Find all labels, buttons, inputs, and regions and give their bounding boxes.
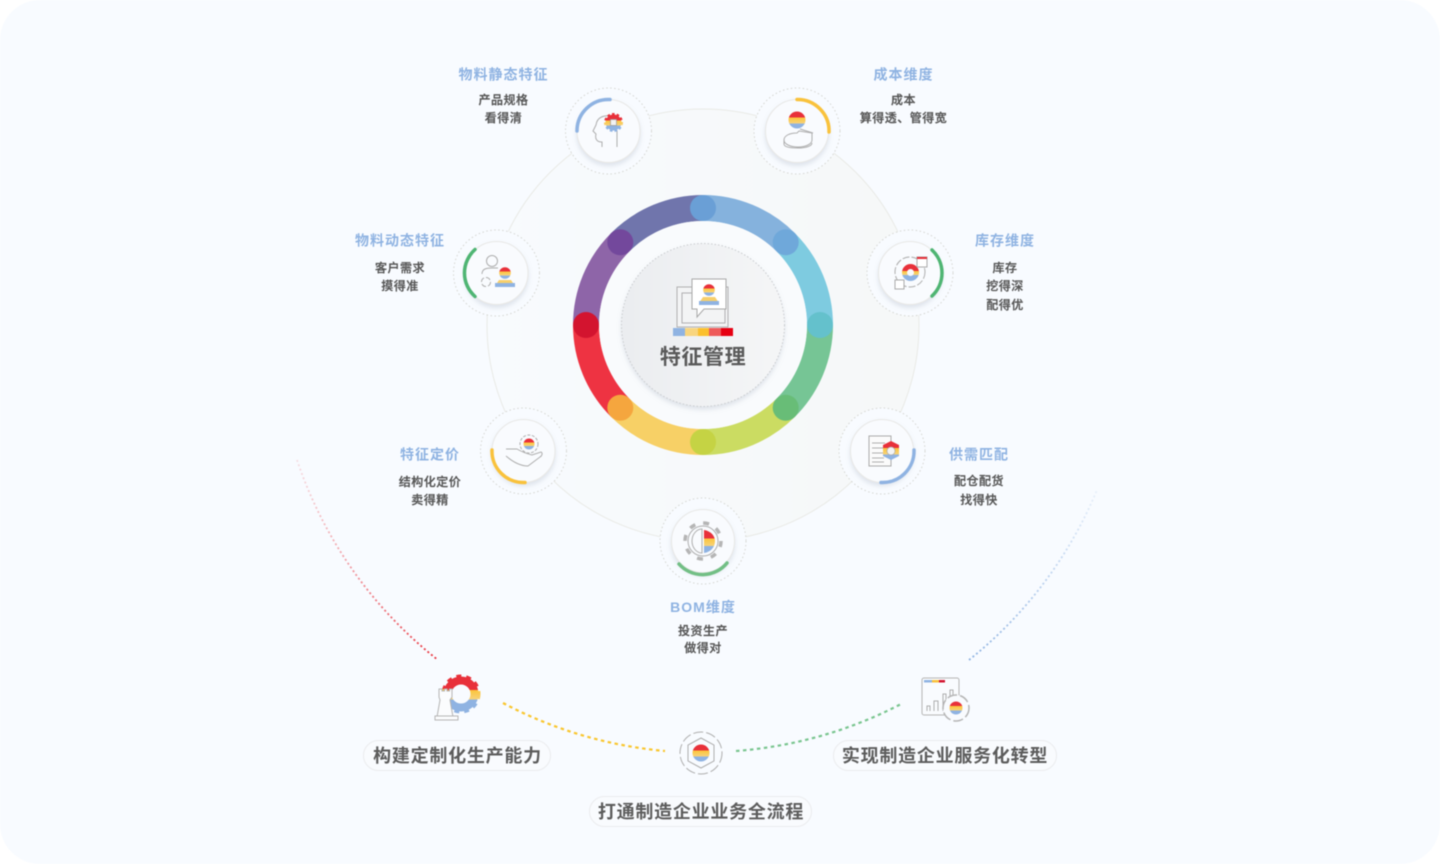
label: 库存维度 [975, 232, 1035, 248]
node: 特征定价: 结构化定价 [399, 474, 461, 489]
label: 成本维度 [874, 66, 934, 82]
central colour ring [573, 195, 833, 455]
bottom item: 实现制造企业服务化转型 [834, 678, 1056, 770]
label: 特征定价 [400, 446, 460, 462]
label: 物料动态特征 [355, 232, 445, 248]
icon: dashboard window [922, 678, 969, 721]
bottom item: 打通制造企业业务全流程 [590, 732, 812, 826]
icon: document with AI hexagon [869, 436, 899, 466]
central hub: 特征管理 [599, 221, 807, 429]
node: 物料静态特征 [458, 66, 652, 174]
node: BOM维度: 做得对 [684, 640, 722, 655]
green dotted arc [736, 703, 903, 751]
label: BOM维度 [670, 599, 736, 615]
node: 物料动态特征 [355, 230, 540, 316]
label pill [834, 740, 1056, 770]
node: 成本维度: 成本 [891, 92, 916, 107]
large orbit circle [487, 109, 919, 541]
bottom item: 实现制造企业服务化转型: 实现制造企业服务化转型 [842, 745, 1048, 766]
icon: hexagon target [680, 732, 722, 774]
node: 物料动态特征: 摸得准 [381, 278, 419, 293]
icon: gear with brain [685, 523, 721, 559]
node: 库存维度: 挖得深 [986, 278, 1024, 293]
node: 供需匹配 [839, 408, 1009, 507]
node: 物料静态特征: 看得清 [485, 110, 522, 125]
node: 物料静态特征: 产品规格 [478, 92, 529, 107]
icon: laptop with user bubble [673, 279, 733, 336]
node: 物料动态特征: 客户需求 [375, 260, 425, 275]
node: 供需匹配: 找得快 [960, 492, 998, 507]
node: BOM维度: 投资生产 [678, 623, 728, 638]
node: 特征定价 [399, 408, 566, 507]
yellow dotted arc [503, 703, 665, 751]
label: 物料静态特征 [458, 66, 548, 82]
icon: chess rook and gear [435, 676, 479, 720]
label pill [590, 796, 812, 826]
node: 成本维度: 算得透、管得宽 [860, 110, 947, 125]
icon: hand with gear [506, 435, 542, 466]
bottom item: 构建定制化生产能力: 构建定制化生产能力 [373, 745, 542, 766]
icon: users [482, 256, 515, 287]
icon: head with gear [593, 114, 622, 147]
label pill [364, 740, 550, 770]
red dotted arc [297, 460, 438, 660]
blue dotted arc [969, 490, 1097, 660]
node: 库存维度 [867, 230, 1035, 316]
node: 库存维度: 库存 [992, 260, 1018, 275]
node: BOM维度 [660, 498, 746, 655]
bottom item: 打通制造企业业务全流程: 打通制造企业业务全流程 [598, 801, 804, 822]
label: 供需匹配 [949, 446, 1009, 462]
bottom item: 构建定制化生产能力 [364, 676, 550, 770]
node: 库存维度: 配得优 [986, 297, 1024, 312]
node: 供需匹配: 配仓配货 [954, 473, 1004, 488]
node: 特征定价: 卖得精 [411, 492, 449, 507]
hub title: 特征管理 [660, 346, 746, 369]
icon: inventory gear [895, 257, 927, 289]
node: 成本维度 [754, 66, 947, 174]
icon: coin on pie [784, 112, 813, 148]
